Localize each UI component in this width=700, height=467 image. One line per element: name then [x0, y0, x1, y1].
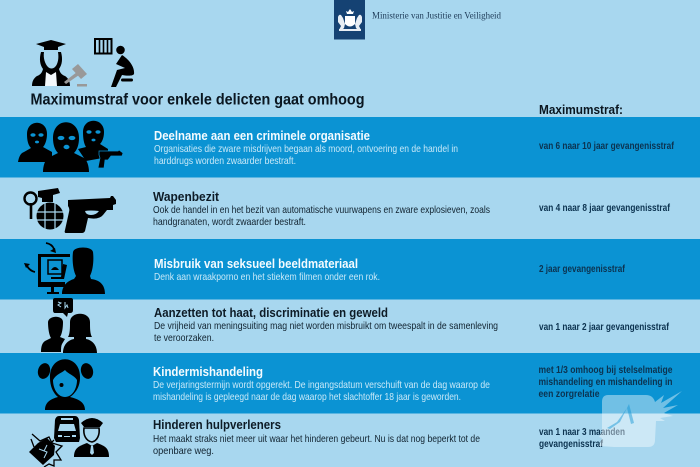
- title: Maximumstraf voor enkele delicten gaat omhoog: [30, 92, 364, 108]
- band: criminal organisation: [0, 117, 700, 178]
- sentence: met 1/3 omhoog bij stelselmatige: [538, 365, 673, 376]
- heading: Deelname aan een criminele organisatie: [154, 128, 370, 143]
- row 4: incitement: te veroorzaken.: [154, 333, 214, 344]
- row 2: weapons: handgranaten, wordt zwaarder bestraft.: [153, 217, 306, 228]
- icon: child with pigtails: [36, 359, 95, 410]
- heading: Wapenbezit: [153, 189, 220, 204]
- sentence: van 6 naar 10 jaar gevangenisstraf: [539, 141, 675, 152]
- column heading: Maximumstraf:: [539, 103, 623, 117]
- row 5: child abuse: mishandeling en mishandeling in: [538, 377, 672, 388]
- icon: two people with speech bubble: [41, 298, 97, 353]
- row 5: child abuse: een zorgrelatie: [538, 389, 600, 400]
- watermark: megaphone logo: [599, 391, 682, 447]
- row 1: criminal organisation: [18, 121, 675, 172]
- row 6: obstructing emergency workers: openbare weg.: [153, 446, 214, 457]
- row 1: criminal organisation: harddrugs worden zwaarder bestraft.: [154, 156, 296, 167]
- row 4: incitement: [41, 298, 670, 353]
- band: child abuse: [0, 353, 700, 414]
- row 5: child abuse: [36, 359, 673, 410]
- icon: grenade and pistol: [24, 188, 116, 233]
- sentence: van 1 naar 2 jaar gevangenisstraf: [539, 322, 670, 333]
- icon: prisoner: [95, 39, 134, 87]
- icon: masked figures with gun: [18, 121, 123, 172]
- heading: Hinderen hulpverleners: [153, 417, 281, 432]
- row 6: obstructing emergency workers: gevangenisstraf: [539, 439, 604, 450]
- sentence: 2 jaar gevangenisstraf: [539, 264, 626, 275]
- heading: Aanzetten tot haat, discriminatie en geweld: [154, 305, 388, 320]
- icon: ambulance, officer and fist: [29, 416, 109, 467]
- row 6: obstructing emergency workers: [29, 416, 625, 467]
- icon: judge with gavel: [32, 40, 87, 86]
- band: sexual imagery: [0, 239, 700, 300]
- sentence: van 1 naar 3 maanden: [539, 427, 625, 438]
- row 2: weapons: [24, 188, 671, 233]
- logo: ministry crest: [334, 0, 365, 40]
- description: De verjaringstermijn wordt opgerekt. De ingangsdatum verschuift van de dag waarop de: [153, 380, 490, 391]
- description: Ook de handel in en het bezit van automatische vuurwapens en zware explosieven, zoals: [153, 205, 490, 216]
- description: Het maakt straks niet meer uit waar het hinderen gebeurt. Nu is dat nog beperkt tot de: [153, 434, 480, 445]
- sentence: van 4 naar 8 jaar gevangenisstraf: [539, 203, 671, 214]
- heading: Misbruik van seksueel beeldmateriaal: [154, 256, 358, 271]
- heading: Kindermishandeling: [153, 364, 263, 379]
- row 5: child abuse: mishandeling is gepleegd naar de dag waarop het slachtoffer 18 jaar is geworden.: [153, 392, 461, 403]
- description: Organisaties die zware misdrijven begaan als moord, ontvoering en de handel in: [154, 144, 458, 155]
- description: Denk aan wraakporno en het stiekem filmen onder een rok.: [154, 272, 380, 283]
- description: De vrijheid van meningsuiting mag niet worden misbruikt om tweespalt in de samenleving: [154, 321, 498, 332]
- row 3: sexual imagery: [24, 243, 626, 294]
- ministry name: Ministerie van Justitie en Veiligheid: [372, 10, 501, 22]
- icon: monitor, arrows and viewer: [24, 243, 105, 294]
